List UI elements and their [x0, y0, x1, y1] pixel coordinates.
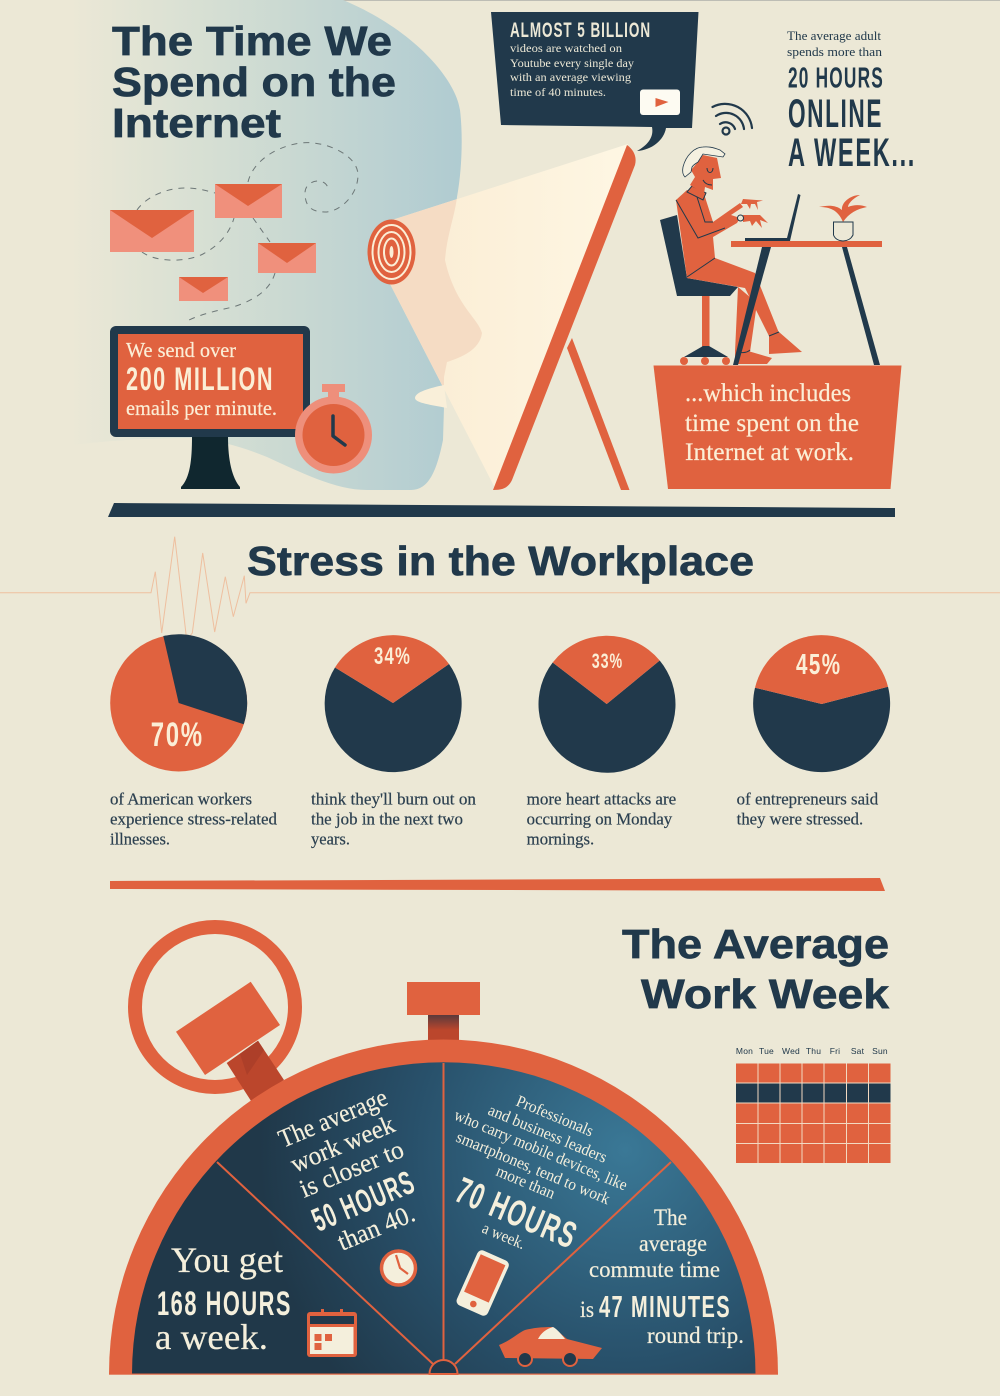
desk	[731, 241, 882, 365]
icon: envelope right	[258, 243, 316, 273]
icon: play button	[640, 90, 680, 115]
segment: 47 minutes: round trip.	[647, 1323, 744, 1348]
segment: 70 hours: Professionals	[513, 1091, 596, 1140]
icon: small stopwatch	[295, 384, 372, 474]
speech bubble: youtube: time of 40 minutes.	[510, 85, 606, 99]
segment: 50 hours: work week	[286, 1109, 399, 1179]
segment: 70 hours: more than	[493, 1161, 558, 1203]
dividers	[217, 1063, 671, 1364]
panel: internet time illustration	[0, 0, 916, 490]
text: twenty hours online: The average adult	[787, 28, 881, 43]
back foot	[735, 350, 772, 364]
caption: entrepreneurs: they were stressed.	[737, 810, 863, 828]
title: Internet	[112, 100, 281, 146]
chair	[660, 215, 738, 365]
caption: heart attacks: more heart attacks are	[527, 790, 676, 808]
segment: 70 hours: 70 HOURS	[450, 1170, 584, 1257]
head	[690, 155, 721, 194]
hair	[683, 147, 725, 177]
icon: envelope small	[179, 277, 228, 301]
eye and smile	[703, 168, 713, 185]
segment: 168 hours: 168 HOURS	[157, 1285, 292, 1323]
top stem	[428, 1013, 459, 1043]
heading: the average work week	[622, 921, 889, 1017]
weekday labels: Mon	[736, 1046, 753, 1056]
clothing lines	[676, 197, 779, 353]
callout: internet at work: Internet at work.	[685, 439, 854, 466]
title: The Time We	[112, 18, 392, 64]
caption: heart attacks: mornings.	[527, 830, 594, 848]
weekday labels: Wed	[782, 1046, 800, 1056]
heading: Stress in the Workplace	[247, 538, 754, 584]
weekday labels: Sat	[851, 1046, 865, 1056]
segment: 47 minutes: The	[654, 1205, 687, 1230]
caption: burn out: think they'll burn out on	[311, 790, 476, 808]
caption: American workers: experience stress-related	[110, 810, 278, 828]
screen stand	[567, 338, 630, 490]
icon: calendar	[307, 1309, 357, 1357]
side button	[176, 982, 280, 1075]
callout: internet at work: ...which includes	[685, 380, 851, 407]
calendar grid	[736, 1046, 890, 1163]
top button	[407, 982, 480, 1015]
weekday labels: Tue	[759, 1046, 774, 1056]
speech bubble: youtube: ALMOST 5 BILLION	[510, 19, 651, 42]
speech bubble: youtube: Youtube every single day	[510, 56, 634, 70]
pie chart: 70 percent: 70%	[151, 716, 204, 754]
pie chart: 34 percent: 34%	[374, 643, 411, 670]
text: twenty hours online: 20 HOURS	[788, 62, 884, 94]
mouth	[415, 385, 447, 408]
text: twenty hours online	[787, 28, 916, 175]
illustration: man at desk	[660, 147, 882, 365]
weekday labels: Fri	[830, 1046, 840, 1056]
plant	[819, 195, 867, 241]
segment: 50 hours: 50 HOURS	[306, 1163, 420, 1238]
weekday labels: Sun	[872, 1046, 888, 1056]
segment: 168 hours: You get	[171, 1240, 283, 1280]
watch	[738, 215, 744, 221]
pie chart: 70 percent	[110, 634, 247, 772]
segment: 70 hours: who carry mobile devices, like	[451, 1105, 630, 1194]
heartbeat line	[0, 537, 1000, 640]
heading: the average work week: Work Week	[641, 971, 889, 1017]
callout: emails per minute	[126, 338, 277, 420]
back leg	[735, 287, 757, 352]
heading: the average work week: The Average	[622, 921, 889, 967]
segment: 50 hours	[274, 1083, 420, 1285]
segment: 70 hours	[450, 1091, 630, 1317]
icon: wifi	[712, 104, 752, 134]
title	[112, 18, 396, 146]
segment: 168 hours	[155, 1240, 357, 1357]
screen frame	[493, 145, 636, 490]
dial hub	[430, 1360, 458, 1374]
icon: envelope top	[215, 184, 282, 218]
hands	[741, 199, 768, 228]
text: twenty hours online: A WEEK...	[788, 131, 916, 175]
segment: 47 minutes	[499, 1205, 744, 1366]
segment: 50 hours: is closer to	[295, 1134, 408, 1204]
segment: 70 hours: a week.	[479, 1218, 528, 1253]
caption: American workers	[110, 790, 278, 848]
pie chart: 45 percent: 45%	[796, 649, 842, 681]
caption: American workers: illnesses.	[110, 830, 170, 848]
case	[109, 1039, 778, 1374]
winding ring	[135, 927, 295, 1087]
caption: entrepreneurs	[737, 790, 879, 828]
screen light cone	[388, 144, 628, 490]
text: twenty hours online: spends more than	[787, 44, 883, 59]
segment: 47 minutes: is	[580, 1297, 594, 1322]
callout: emails per minute: We send over	[126, 338, 236, 362]
caption: heart attacks	[527, 790, 676, 848]
segment: 47 minutes: commute time	[589, 1257, 720, 1282]
text: twenty hours online: ONLINE	[788, 92, 883, 136]
icon: monitor	[110, 326, 310, 489]
pie chart: 34 percent	[325, 635, 462, 772]
pie chart: 45 percent	[753, 635, 890, 772]
callout: internet at work: time spent on the	[685, 410, 859, 437]
title: Spend on the	[112, 59, 396, 105]
dial	[132, 1062, 756, 1374]
panel: stress in the workplace	[0, 537, 1000, 848]
speech bubble: youtube	[491, 12, 698, 151]
callout: emails per minute: emails per minute.	[126, 396, 277, 420]
segment: 168 hours: a week.	[155, 1317, 268, 1357]
weekday labels: Thu	[806, 1046, 821, 1056]
icon: target eye	[368, 220, 416, 284]
caption: entrepreneurs: of entrepreneurs said	[737, 790, 879, 808]
speech bubble: youtube: with an average viewing	[510, 70, 631, 84]
segment: 50 hours: than 40.	[333, 1199, 419, 1257]
pie chart: 33 percent	[538, 636, 675, 773]
dashed email flight paths	[137, 143, 358, 322]
caption: burn out: years.	[311, 830, 350, 848]
laptop	[745, 194, 800, 241]
head silhouette	[0, 0, 482, 490]
speech bubble: youtube: videos are watched on	[510, 41, 622, 55]
caption: American workers: of American workers	[110, 790, 252, 808]
caption: burn out: the job in the next two	[311, 810, 463, 828]
front foot	[769, 332, 802, 354]
segment: 50 hours: The average	[274, 1083, 391, 1154]
icon: envelope large	[110, 210, 194, 252]
giant stopwatch	[109, 927, 778, 1375]
weekday labels	[736, 1046, 888, 1056]
collar	[687, 186, 706, 200]
callout: internet at work	[654, 366, 902, 489]
segment: 70 hours: and business leaders	[485, 1100, 610, 1167]
pie chart: 33 percent: 33%	[592, 650, 623, 673]
icon: smartphone	[455, 1249, 510, 1317]
callout: emails per minute: 200 MILLION	[126, 361, 274, 397]
segment: 47 minutes: 47 MINUTES	[599, 1289, 731, 1324]
torso and thigh	[676, 190, 779, 336]
cone over the face	[390, 199, 482, 386]
caption: burn out	[311, 790, 476, 848]
segment: 70 hours: smartphones, tend to work	[453, 1127, 614, 1209]
caption: heart attacks: occurring on Monday	[527, 810, 673, 828]
icon: car	[499, 1327, 602, 1366]
side stem	[227, 1041, 284, 1102]
segment: 47 minutes: average	[639, 1231, 707, 1256]
icon: clock	[382, 1251, 416, 1285]
